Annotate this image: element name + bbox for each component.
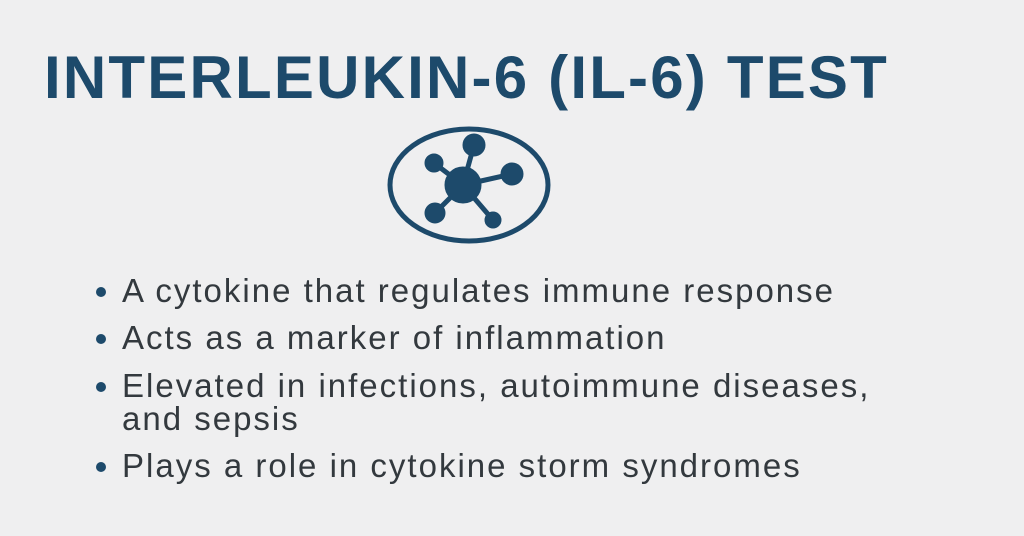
bullet 3: Elevated in infections, autoimmune diseases, (122, 367, 870, 404)
bullet 4: Plays a role in cytokine storm syndromes (122, 447, 802, 484)
bullet 2: Acts as a marker of inflammation (122, 319, 666, 356)
bullet 3 (96, 367, 870, 437)
bullet 1: A cytokine that regulates immune response (122, 272, 835, 309)
title: INTERLEUKIN-6 (IL-6) TEST (44, 44, 889, 111)
bullet 3: and sepsis (122, 400, 300, 437)
